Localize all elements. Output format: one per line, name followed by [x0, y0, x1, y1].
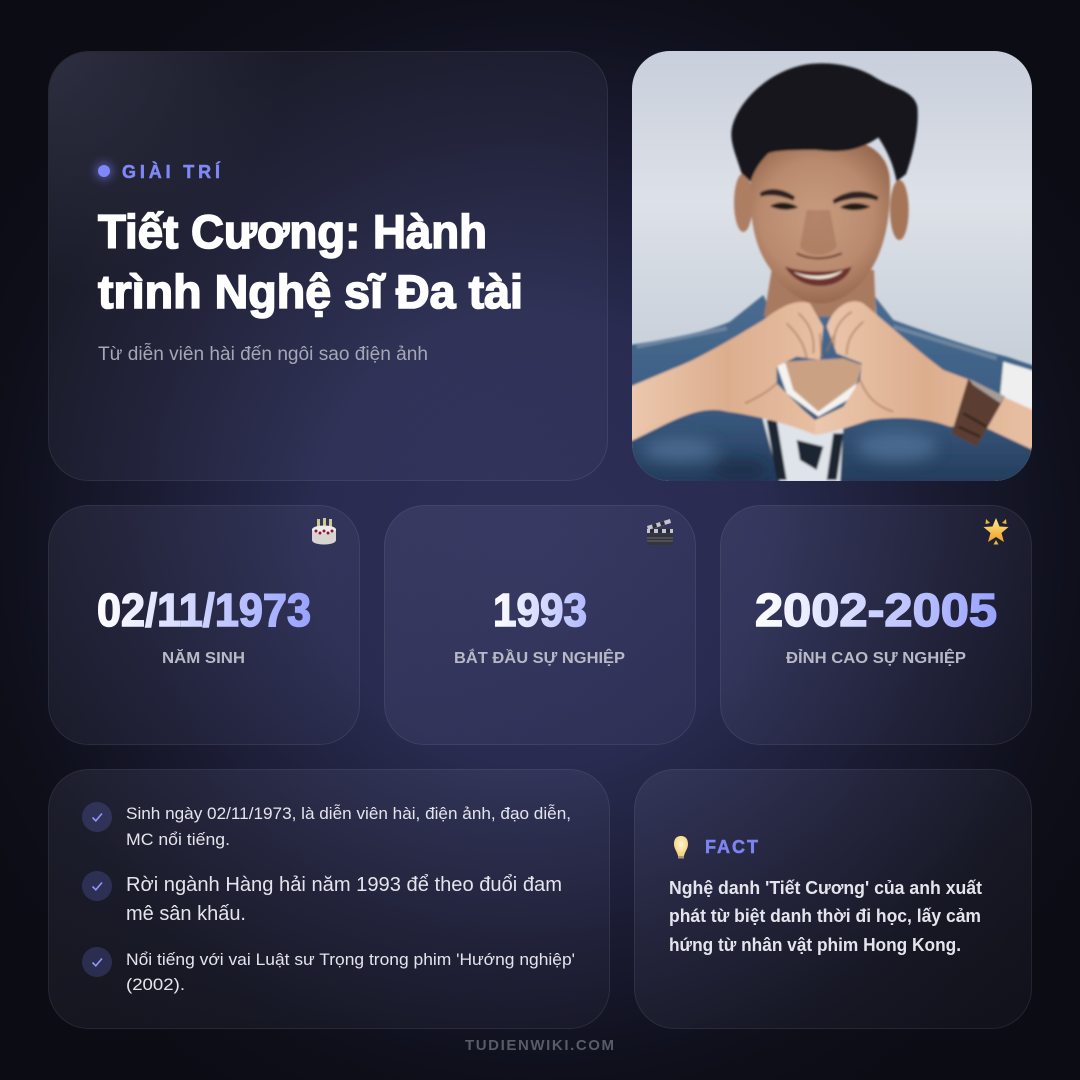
- list item 3: Nổi tiếng với vai Luật sư Trọng trong phim 'Hướng nghiệp': [126, 950, 575, 969]
- stat label: BẮT ĐẦU SỰ NGHIỆP: [454, 649, 625, 667]
- stat value: 2002-2005: [755, 584, 997, 636]
- subtitle: Từ diễn viên hài đến ngôi sao điện ảnh: [98, 343, 428, 365]
- panel: fact card: [634, 770, 1032, 1028]
- icon: light bulb: [674, 836, 688, 858]
- icon: clapperboard: [647, 519, 673, 545]
- photo: man making a heart gesture with his hands: [630, 50, 1037, 483]
- footer brand: TUDIENWIKI.COM: [465, 1037, 614, 1054]
- stat label: ĐỈNH CAO SỰ NGHIỆP: [786, 649, 966, 667]
- panel: key points list: [48, 770, 610, 1028]
- title: Tiết Cương: Hành: [98, 205, 487, 258]
- list item 2: mê sân khấu.: [126, 903, 246, 925]
- fact text: [669, 878, 982, 955]
- list item 1: Sinh ngày 02/11/1973, là diễn viên hài, điện ảnh, đạo diễn,: [126, 804, 571, 823]
- panel: hero title card: [48, 52, 608, 480]
- icon: glowing star: [984, 518, 1008, 544]
- list item 1: [82, 802, 571, 849]
- fact text: hứng từ nhân vật phim Hong Kong.: [669, 935, 961, 955]
- stat label: NĂM SINH: [162, 650, 245, 667]
- list item 2: Rời ngành Hàng hải năm 1993 để theo đuổi đam: [126, 874, 562, 896]
- list item 2: [82, 871, 562, 925]
- list item 1: MC nổi tiếng.: [126, 830, 230, 849]
- icon: birthday cake: [312, 518, 336, 544]
- fact text: Nghệ danh 'Tiết Cương' của anh xuất: [669, 878, 982, 898]
- list item 3: (2002).: [126, 975, 185, 994]
- stat value: 1993: [493, 584, 587, 636]
- title: [98, 205, 523, 318]
- fact text: phát từ biệt danh thời đi học, lấy cảm: [669, 906, 981, 926]
- title: trình Nghệ sĩ Đa tài: [98, 265, 523, 318]
- stat value: 02/11/1973: [97, 584, 311, 636]
- panel: stat career peak: [720, 506, 1032, 744]
- category tag: Giải trí: GIÀI TRÍ: [122, 161, 221, 182]
- list item 3: [82, 947, 575, 994]
- panel: stat career start: [384, 506, 696, 744]
- fact heading: FACT: [705, 837, 758, 857]
- panel: stat birth date: [48, 506, 360, 744]
